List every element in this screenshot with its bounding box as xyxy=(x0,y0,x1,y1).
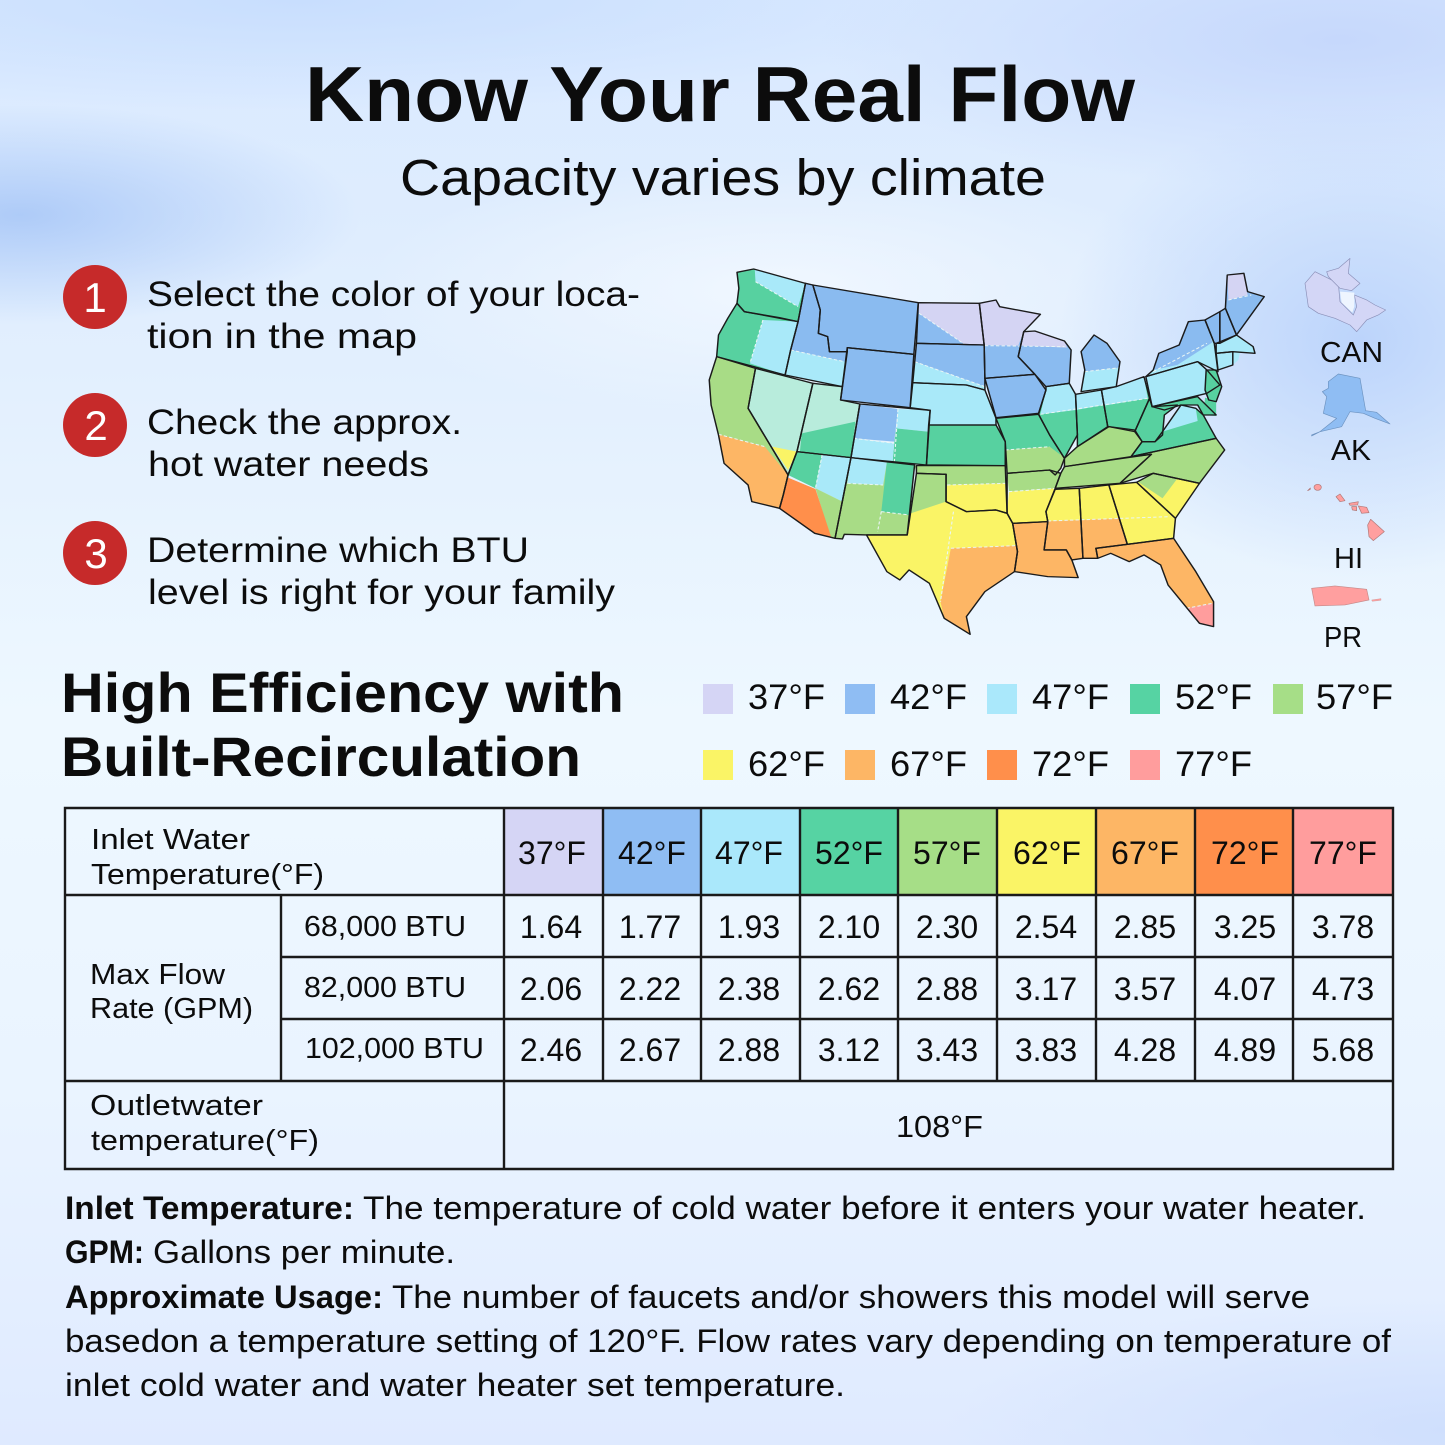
step 2: hot water needs xyxy=(148,445,429,484)
68,000 BTU values: 1.64 xyxy=(520,909,582,945)
footnotes: Approximate Usage: xyxy=(65,1279,383,1315)
step 3 xyxy=(63,521,616,612)
section heading: Built-Recirculation xyxy=(61,725,581,788)
102,000 BTU values: 3.12 xyxy=(818,1032,880,1068)
icon: Alaska inset xyxy=(1312,374,1390,436)
header temperatures: 77°F xyxy=(1309,835,1377,871)
outlet temperature value: 108°F xyxy=(896,1109,983,1144)
header temperatures: 47°F xyxy=(715,835,783,871)
legend: 52°F xyxy=(1175,678,1252,717)
row labels: 102,000 BTU xyxy=(305,1033,484,1065)
68,000 BTU values: 2.85 xyxy=(1114,909,1176,945)
82,000 BTU values: 2.62 xyxy=(818,971,880,1007)
map: contiguous US climate zones xyxy=(709,269,1264,634)
step 2: Check the approx. xyxy=(147,403,462,442)
row labels: Inlet Water xyxy=(91,824,250,856)
step 1: tion in the map xyxy=(147,317,417,356)
icon: Hawaii inset xyxy=(1308,484,1384,541)
82,000 BTU values: 3.57 xyxy=(1114,971,1176,1007)
section heading: High Efficiency with xyxy=(61,661,624,724)
102,000 BTU values: 5.68 xyxy=(1312,1032,1374,1068)
legend: 67°F xyxy=(890,745,967,784)
82,000 BTU values: 2.38 xyxy=(718,971,780,1007)
icon: Canada inset xyxy=(1305,258,1386,332)
row labels: temperature(°F) xyxy=(91,1125,319,1157)
footnotes: Inlet Temperature: xyxy=(65,1190,354,1226)
82,000 BTU values: 4.07 xyxy=(1214,971,1276,1007)
table grid xyxy=(65,808,1393,1169)
subtitle: Capacity varies by climate xyxy=(400,149,1046,206)
footnotes: The temperature of cold water before it enters your water heater. xyxy=(363,1190,1366,1226)
footnotes xyxy=(65,1190,1391,1403)
82,000 BTU values: 3.17 xyxy=(1015,971,1077,1007)
68,000 BTU values: 1.77 xyxy=(619,909,681,945)
legend: 37°F xyxy=(748,678,825,717)
68,000 BTU values: 3.25 xyxy=(1214,909,1276,945)
step 2 xyxy=(63,393,462,484)
steps list xyxy=(63,265,640,612)
102,000 BTU values: 3.43 xyxy=(916,1032,978,1068)
row labels xyxy=(90,824,484,1157)
label: AK: AK xyxy=(1331,435,1372,467)
row labels: Outletwater xyxy=(90,1090,263,1122)
82,000 BTU values xyxy=(520,971,1374,1007)
82,000 BTU values: 4.73 xyxy=(1312,971,1374,1007)
102,000 BTU values: 4.28 xyxy=(1114,1032,1176,1068)
step 1: Select the color of your loca- xyxy=(147,275,640,314)
legend: 47°F xyxy=(1032,678,1109,717)
step 3: 3 xyxy=(84,530,108,577)
zone boundaries xyxy=(718,282,1251,608)
zone fills per state xyxy=(709,269,1264,634)
header temperatures: 67°F xyxy=(1111,835,1179,871)
footnotes: inlet cold water and water heater set temperature. xyxy=(65,1367,845,1403)
legend: 57°F xyxy=(1316,678,1393,717)
footnotes: The number of faucets and/or showers this model will serve xyxy=(392,1279,1310,1315)
68,000 BTU values: 2.54 xyxy=(1015,909,1077,945)
row labels: Max Flow xyxy=(90,959,226,991)
flow rate table xyxy=(65,808,1393,1169)
header temperatures: 62°F xyxy=(1013,835,1081,871)
68,000 BTU values: 2.30 xyxy=(916,909,978,945)
step 1: 1 xyxy=(83,274,107,321)
102,000 BTU values xyxy=(520,1032,1374,1068)
header temperatures: 52°F xyxy=(815,835,883,871)
state borders xyxy=(709,269,1264,634)
section heading xyxy=(61,661,624,788)
header temperatures: 57°F xyxy=(913,835,981,871)
row labels: Temperature(°F) xyxy=(91,859,324,891)
header temperatures xyxy=(518,835,1377,871)
82,000 BTU values: 2.22 xyxy=(619,971,681,1007)
68,000 BTU values: 3.78 xyxy=(1312,909,1374,945)
legend: 62°F xyxy=(748,745,825,784)
footnotes: Gallons per minute. xyxy=(153,1234,455,1270)
header temperatures: 42°F xyxy=(618,835,686,871)
legend: 42°F xyxy=(890,678,967,717)
102,000 BTU values: 4.89 xyxy=(1214,1032,1276,1068)
102,000 BTU values: 3.83 xyxy=(1015,1032,1077,1068)
82,000 BTU values: 2.06 xyxy=(520,971,582,1007)
header temperatures: 72°F xyxy=(1211,835,1279,871)
legend xyxy=(703,678,1393,784)
step 2: 2 xyxy=(84,402,108,449)
102,000 BTU values: 2.67 xyxy=(619,1032,681,1068)
row labels: 68,000 BTU xyxy=(304,911,466,943)
legend: 77°F xyxy=(1175,745,1252,784)
68,000 BTU values: 2.10 xyxy=(818,909,880,945)
step 3: Determine which BTU xyxy=(147,531,529,570)
table header colours xyxy=(504,808,1393,895)
68,000 BTU values: 1.93 xyxy=(718,909,780,945)
step 1 xyxy=(63,265,640,356)
footnotes: basedon a temperature setting of 120°F. Flow rates vary depending on temperature of xyxy=(65,1323,1391,1359)
row labels: Rate (GPM) xyxy=(90,993,253,1025)
row labels: 82,000 BTU xyxy=(304,972,466,1004)
footnotes: GPM: xyxy=(65,1234,144,1270)
label: PR: PR xyxy=(1324,622,1362,654)
step 3: level is right for your family xyxy=(148,573,616,612)
title: Know Your Real Flow xyxy=(305,50,1135,138)
legend: 72°F xyxy=(1032,745,1109,784)
68,000 BTU values xyxy=(520,909,1374,945)
icon: Puerto Rico inset xyxy=(1312,586,1381,606)
label: CAN: CAN xyxy=(1320,337,1383,369)
102,000 BTU values: 2.46 xyxy=(520,1032,582,1068)
label: HI: HI xyxy=(1334,543,1363,575)
82,000 BTU values: 2.88 xyxy=(916,971,978,1007)
header temperatures: 37°F xyxy=(518,835,586,871)
102,000 BTU values: 2.88 xyxy=(718,1032,780,1068)
